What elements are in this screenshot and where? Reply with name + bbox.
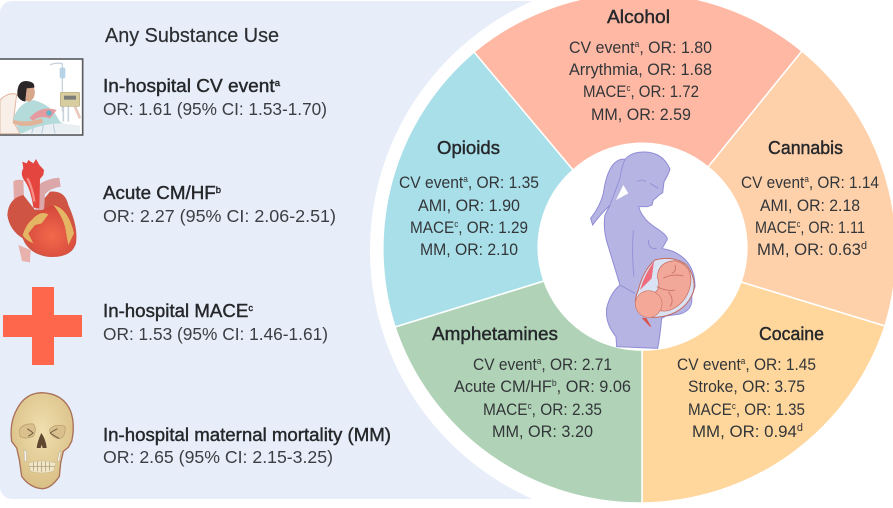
- icon: medical cross: [3, 287, 82, 365]
- segment: cocaine: d: [797, 422, 803, 434]
- segment: amphetamines: MM, OR: 3.20: [492, 422, 593, 441]
- segment: opioids: MACE: [410, 218, 459, 237]
- segment: cannabis: c: [797, 219, 801, 229]
- text: in-hospital MACE: In-hospital MACE: [103, 301, 243, 321]
- segment: amphetamines: Acute CM/HF: [454, 377, 556, 396]
- segment: alcohol: c: [626, 83, 631, 93]
- segment: alcohol: MACE: [583, 82, 632, 101]
- segment: cocaine: CV event: [677, 355, 747, 374]
- segment: cocaine: MACE: [688, 400, 737, 419]
- segment: cannabis: MM, OR: 0.63: [757, 240, 863, 259]
- segment: amphetamines: MACE: [483, 400, 532, 419]
- text: in-hospital CV event: a: [275, 78, 280, 88]
- segment: alcohol: , OR: 1.72: [630, 82, 699, 101]
- icon: patient in hospital bed: [0, 59, 83, 135]
- segment: cocaine: a: [741, 356, 745, 366]
- segment: cannabis: MACE: [755, 218, 804, 237]
- segment: cocaine: Cocaine: [759, 324, 824, 344]
- segment: opioids: a: [463, 174, 468, 184]
- segment: cannabis: , OR: 1.14: [809, 173, 879, 192]
- segment: amphetamines: , OR: 2.35: [532, 400, 602, 419]
- text: acute CM/HF: OR: 2.27 (95% CI: 2.06-2.51): [103, 206, 336, 226]
- segment: cocaine: c: [732, 401, 736, 411]
- segment: alcohol: , OR: 1.80: [639, 38, 712, 57]
- icon: pregnant woman with fetus: [591, 152, 695, 348]
- segment: alcohol: [474, 0, 802, 170]
- segment: cocaine: Stroke, OR: 3.75: [688, 377, 805, 396]
- segment: cannabis: d: [861, 240, 867, 252]
- text: in-hospital maternal mortality: In-hospital maternal mortality (MM): [103, 425, 391, 445]
- segment: cannabis: , OR: 1.11: [800, 218, 865, 237]
- icon: heart: [7, 159, 76, 262]
- text: acute CM/HF: b: [216, 185, 221, 195]
- segment: alcohol: a: [635, 39, 639, 49]
- segment: opioids: AMI, OR: 1.90: [418, 196, 520, 215]
- panel: any substance use background: [0, 1, 668, 499]
- text: in-hospital MACE: OR: 1.53 (95% CI: 1.46-1.61): [103, 324, 328, 344]
- segment: amphetamines: Amphetamines: [432, 324, 558, 344]
- text: in-hospital CV event: [103, 76, 327, 119]
- white ring behind wheel: [370, 1, 668, 499]
- text: in-hospital CV event: In-hospital CV event: [103, 76, 265, 96]
- segment: opioids: , OR: 1.35: [468, 173, 539, 192]
- segment: alcohol: CV event: [569, 38, 639, 57]
- segment: opioids: , OR: 1.29: [458, 218, 528, 237]
- segment: amphetamines: b: [552, 378, 557, 388]
- segment: amphetamines: c: [528, 401, 532, 411]
- segment: alcohol: Alcohol: [607, 7, 670, 27]
- segment: cannabis: [708, 51, 893, 326]
- segment: amphetamines: CV event: [473, 355, 543, 374]
- heading: Any Substance Use: Any Substance Use: [105, 25, 279, 47]
- fetus in womb: [635, 258, 694, 327]
- segment: amphetamines: , OR: 2.71: [541, 355, 612, 374]
- segment: amphetamines: a: [537, 356, 541, 366]
- text: acute CM/HF: [103, 183, 336, 226]
- segment: opioids: c: [454, 219, 459, 229]
- segment: cocaine: MM, OR: 0.94: [692, 422, 798, 441]
- segment: cocaine: [642, 282, 885, 503]
- text: in-hospital MACE: c: [248, 303, 254, 313]
- segment: amphetamines: , OR: 9.06: [557, 377, 631, 396]
- text: acute CM/HF: Acute CM/HF: [103, 183, 211, 203]
- segment: cannabis: CV event: [741, 173, 811, 192]
- text: in-hospital maternal mortality: [103, 425, 391, 467]
- icon: skull: [11, 393, 73, 489]
- segment: cannabis: Cannabis: [768, 138, 843, 158]
- segment: amphetamines: [395, 281, 642, 503]
- segment: cocaine: , OR: 1.45: [745, 355, 816, 374]
- text: in-hospital MACE: [103, 301, 328, 344]
- segment: opioids: [383, 52, 573, 327]
- text: in-hospital CV event: OR: 1.61 (95% CI: 1.53-1.70): [103, 99, 327, 119]
- segment: opioids: Opioids: [437, 138, 500, 158]
- segment: alcohol: MM, OR: 2.59: [591, 105, 691, 124]
- segment: opioids: CV event: [399, 173, 469, 192]
- segment: cannabis: AMI, OR: 2.18: [760, 196, 860, 215]
- segment: opioids: MM, OR: 2.10: [420, 240, 518, 259]
- text: in-hospital maternal mortality: OR: 2.65 (95% CI: 2.15-3.25): [103, 447, 333, 467]
- segment: cannabis: a: [804, 174, 809, 184]
- segment: cocaine: , OR: 1.35: [736, 400, 805, 419]
- chart: substance wheel: [383, 0, 893, 503]
- segment: alcohol: Arrythmia, OR: 1.68: [569, 60, 712, 79]
